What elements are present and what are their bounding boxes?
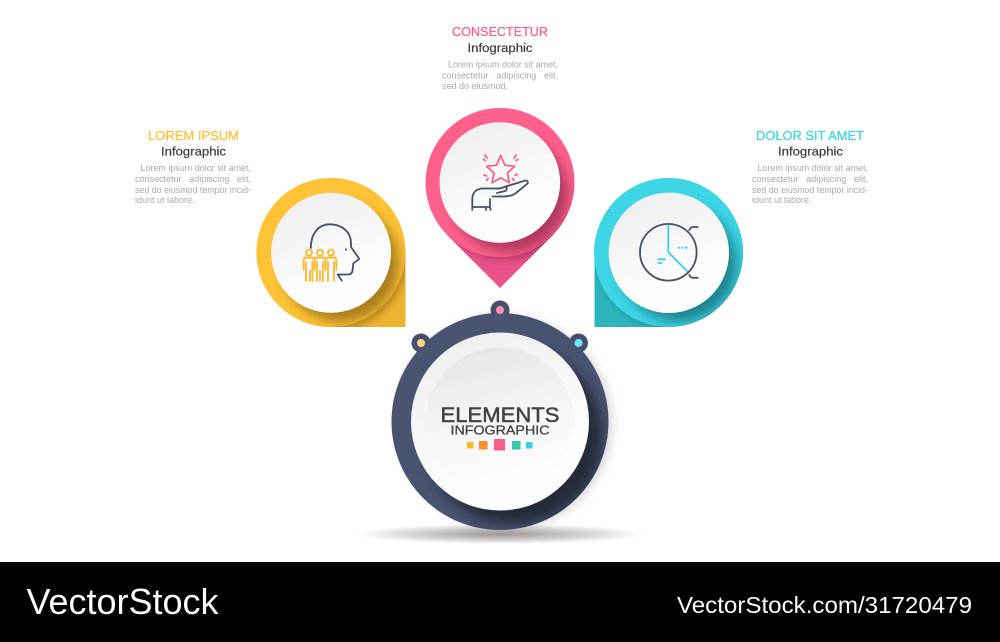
body	[135, 163, 251, 205]
subheading: Infographic	[778, 146, 843, 158]
body: Lorem ipsum dolor sit amet,	[140, 163, 251, 173]
pink pin tip	[447, 235, 553, 288]
body: sed do eiusmod tempor incid-	[135, 185, 251, 195]
heading: CONSECTETUR	[452, 24, 548, 39]
heading: LOREM IPSUM	[148, 128, 239, 143]
footer bar	[0, 562, 1000, 642]
white disc	[440, 122, 560, 243]
teal disc	[594, 178, 743, 327]
body: sed do eiusmod.	[442, 81, 508, 91]
body: idunt ut labore.	[752, 195, 812, 205]
black band	[0, 562, 1000, 642]
yellow disc	[256, 178, 406, 327]
disc outer shadow	[398, 316, 612, 530]
white plate	[411, 332, 589, 510]
ring inner shadow	[426, 348, 602, 524]
disc shadow on tip	[430, 130, 575, 262]
yellow pin body	[256, 178, 406, 327]
ground shadow	[355, 524, 645, 544]
center title: ELEMENTS	[440, 404, 560, 427]
white disc shadow	[283, 206, 399, 322]
body: consectetur adipiscing elit,	[752, 174, 868, 184]
body	[752, 163, 868, 205]
knob dots	[417, 306, 582, 347]
disc shadow on corner	[303, 238, 406, 327]
center subtitle: INFOGRAPHIC	[450, 422, 550, 438]
body: consectetur adipiscing elit,	[135, 174, 251, 184]
text block: consectetur	[442, 24, 558, 91]
subheading: Infographic	[161, 146, 226, 158]
body	[442, 60, 558, 91]
icon: hand holding star	[472, 155, 528, 210]
disc shadow on corner	[598, 278, 664, 327]
dark ring	[392, 313, 608, 530]
panel: teal pin	[594, 178, 744, 330]
body: consectetur adipiscing elit,	[442, 70, 558, 80]
panel: pink pin	[426, 108, 577, 288]
pink disc	[426, 108, 574, 257]
text block: dolor sit amet	[752, 128, 868, 205]
white disc shadow	[621, 206, 737, 322]
footer logo: VectorStock	[26, 581, 219, 622]
color squares	[467, 439, 532, 450]
subheading: Infographic	[468, 43, 533, 55]
connector knobs	[412, 300, 588, 352]
body: Lorem ipsum dolor sit amet,	[758, 163, 868, 173]
body: sed do eiusmod tempor incid-	[752, 185, 868, 195]
text block: lorem ipsum	[135, 128, 251, 205]
teal pin body	[594, 178, 743, 327]
panel: central disc	[392, 300, 612, 530]
body: Lorem ipsum dolor sit amet,	[448, 60, 558, 70]
white disc shadow	[452, 136, 568, 252]
icon: head with team	[304, 224, 359, 281]
inset plate	[426, 348, 574, 496]
white disc	[271, 193, 391, 313]
body: idunt ut labore.	[135, 195, 195, 205]
icon: pie clock	[640, 224, 698, 281]
panel: yellow pin	[256, 178, 408, 330]
white disc	[609, 193, 729, 313]
footer image id: VectorStock.com/31720479	[677, 592, 972, 618]
heading: DOLOR SIT AMET	[756, 128, 864, 143]
